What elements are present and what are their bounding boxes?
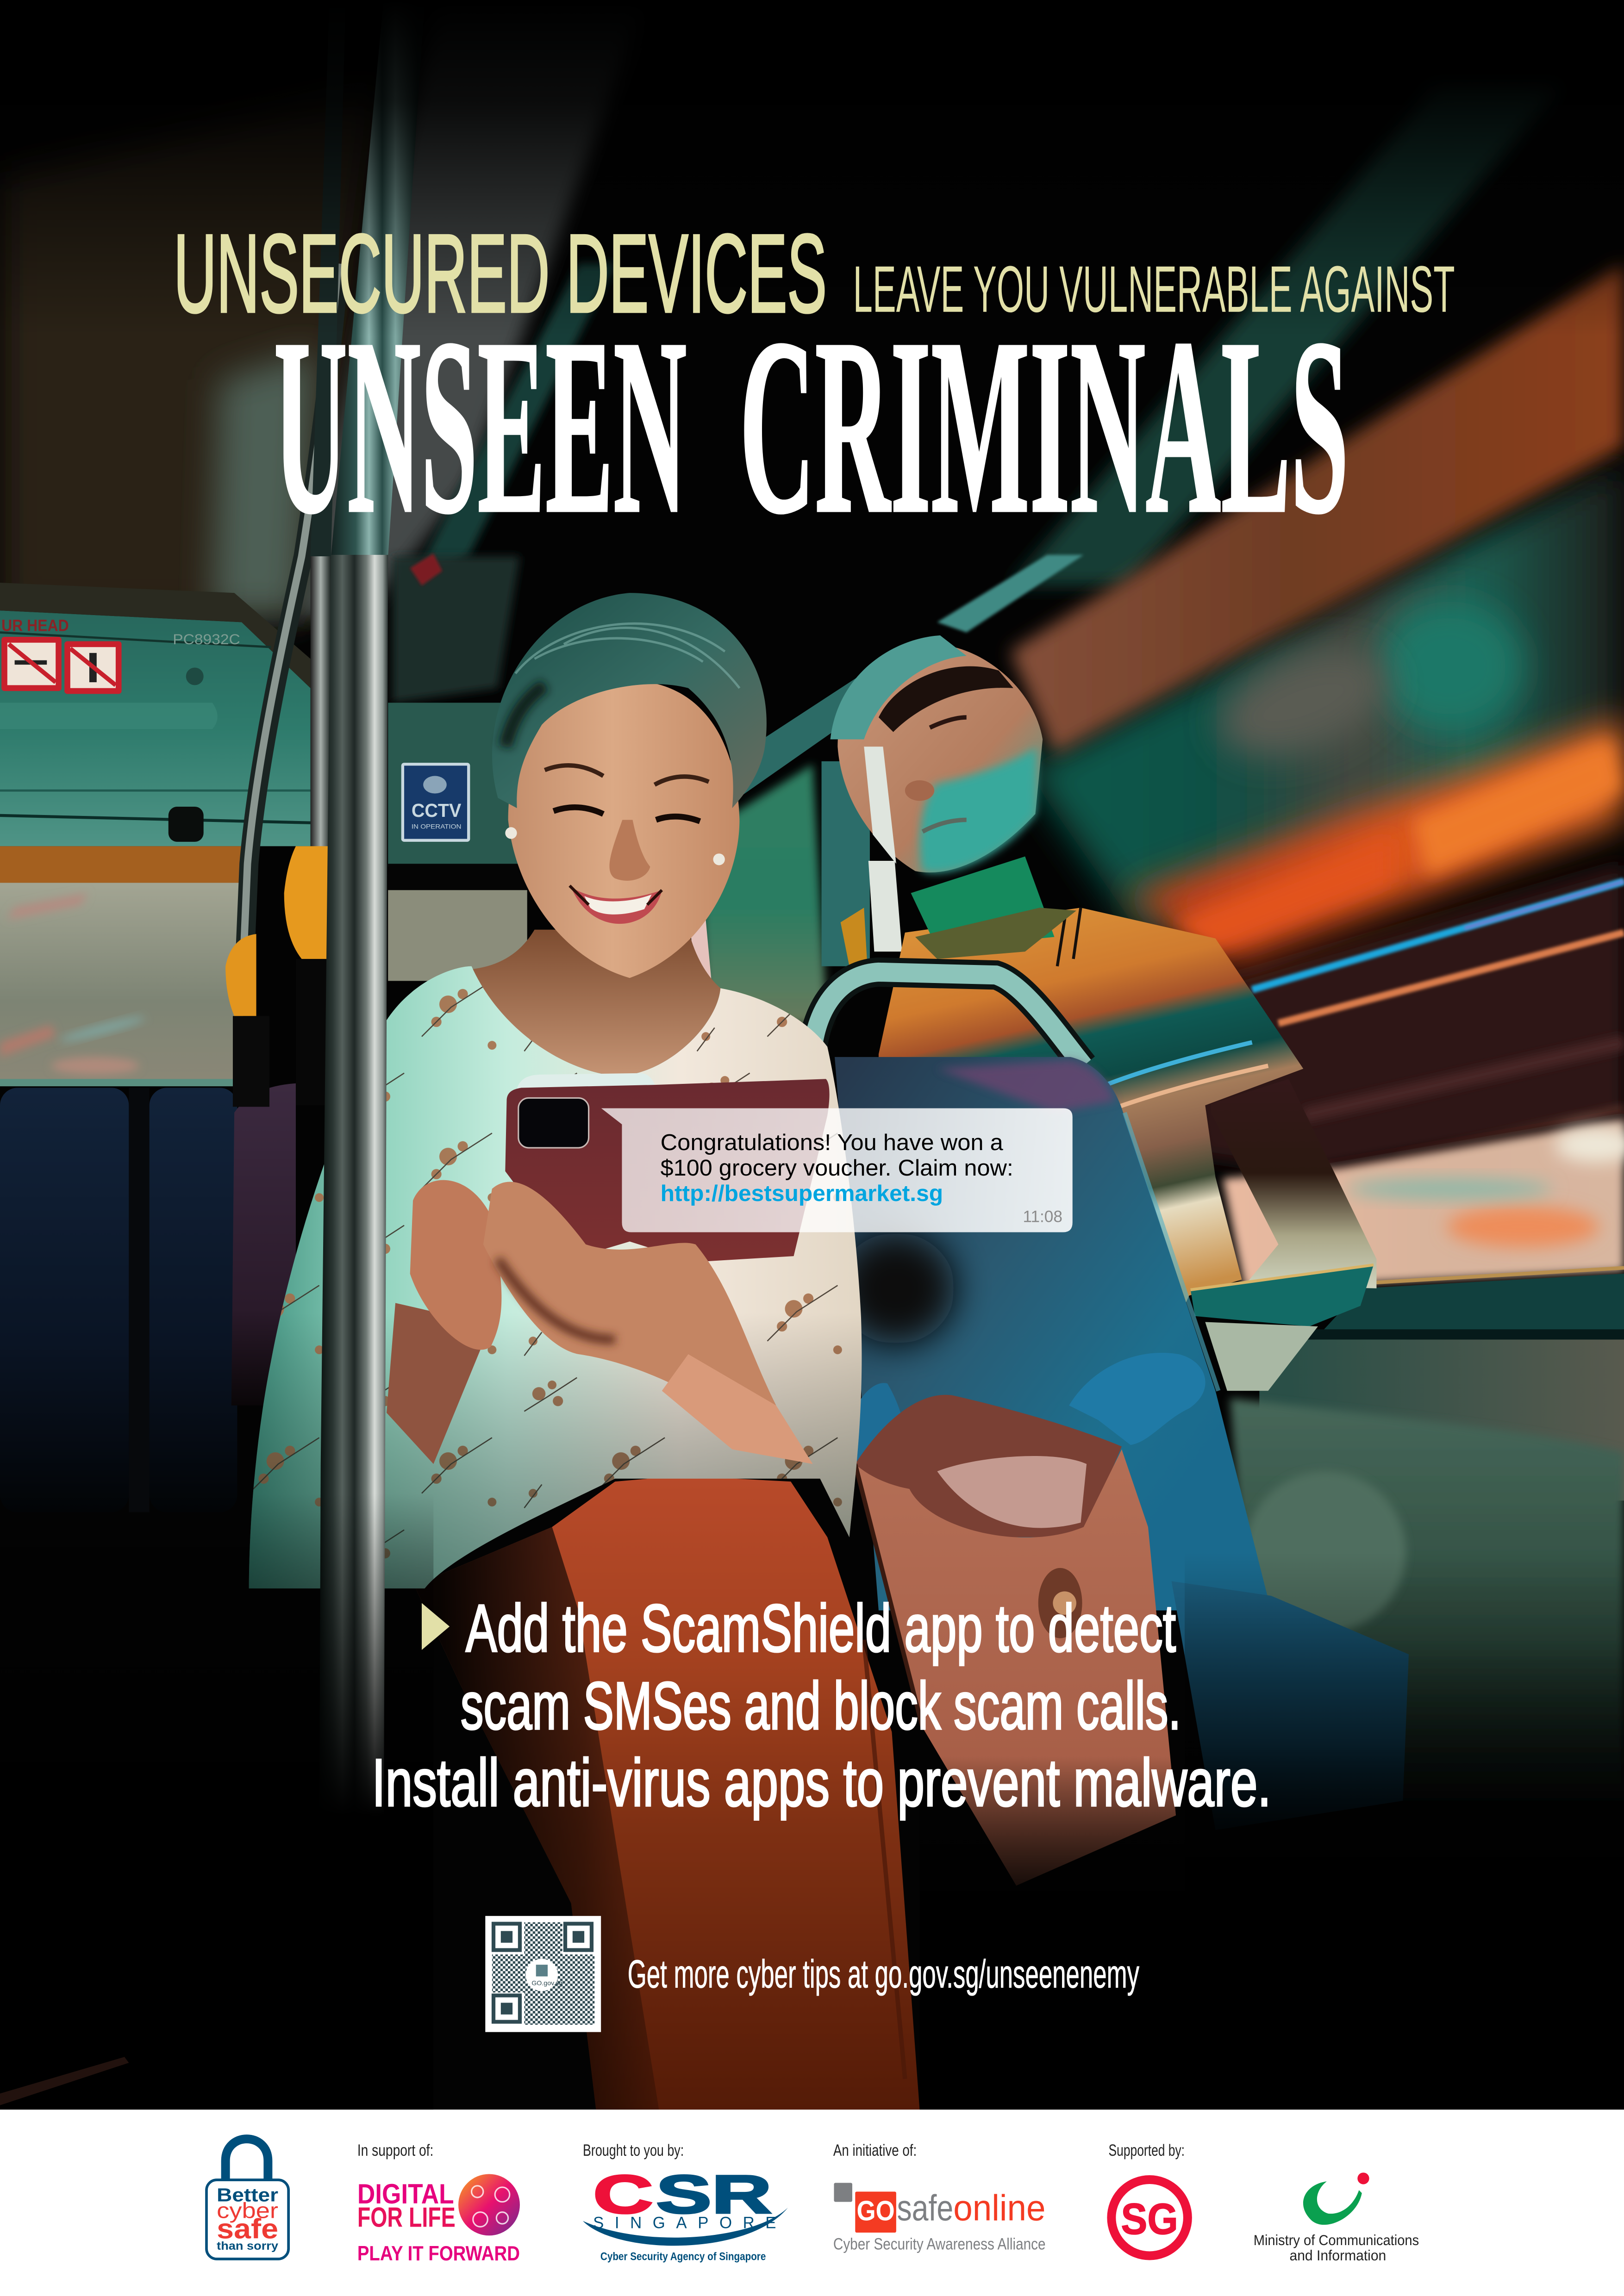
- logo: CSA Singapore: SINGAPORE: [593, 2215, 776, 2232]
- bus seat back with handle: [813, 972, 1409, 1830]
- logo: go safe online: safe: [897, 2187, 953, 2228]
- logo: CSA Singapore: Cyber Security Agency of Singapore: [600, 2251, 766, 2263]
- call to action text: Install anti-virus apps to prevent malware.: [372, 1745, 1271, 1820]
- logo: go safe online: GO: [856, 2195, 895, 2226]
- SMS message bubble: [601, 1108, 1073, 1232]
- logo: CSA Singapore: SR: [656, 2164, 772, 2225]
- headline: unseen criminals: UNSEEN: [274, 286, 687, 566]
- CCTV sign: IN OPERATION: [412, 823, 461, 830]
- logo: CSA Singapore: Brought to you by:: [583, 2142, 684, 2159]
- logo: better cyber safe than sorry: cyber: [217, 2198, 278, 2223]
- handbag being opened: [855, 1395, 1176, 1885]
- SMS message bubble: $100 grocery voucher. Claim now:: [661, 1156, 1013, 1181]
- logo: digital for life: DIGITAL: [357, 2178, 454, 2209]
- ghost: man seated behind the seat: [822, 635, 1303, 1464]
- logo: better cyber safe than sorry: than sorry: [217, 2240, 278, 2252]
- photo: left bus wall with teal panels: [0, 583, 311, 883]
- logo: go safe online: online: [953, 2187, 1046, 2228]
- photo: window panel behind the woman: [388, 703, 827, 1025]
- logo: go safe online: [833, 2142, 1046, 2253]
- logo: better cyber safe than sorry: safe: [217, 2214, 278, 2245]
- call to action text: scam SMSes and block scam calls.: [461, 1668, 1181, 1743]
- logo: SG: [1109, 2142, 1187, 2256]
- logo: go safe online: An initiative of:: [833, 2142, 917, 2159]
- faint light streak at bottom left: [0, 2057, 129, 2105]
- ghost: man's arm and sleeve: [1191, 1079, 1376, 1391]
- logo: better cyber safe than sorry: [206, 2139, 288, 2259]
- logo: better cyber safe than sorry: Better: [217, 2184, 278, 2205]
- warning signs on the wall: PC8932C: [173, 631, 240, 647]
- woman: neck: [472, 930, 720, 1076]
- woman: floral blouse: [249, 966, 864, 1596]
- logo: go safe online: Cyber Security Awareness Alliance: [833, 2235, 1046, 2253]
- empty bus seats on the left: [0, 1083, 296, 1512]
- warning signs on the wall: [1, 617, 240, 694]
- QR code: [485, 1916, 601, 2032]
- woman: bare forearm: [387, 1303, 491, 1464]
- call to action arrow: [422, 1603, 450, 1650]
- woman: orange trousers: [414, 1476, 919, 2109]
- SMS message bubble: Congratulations! You have won a: [661, 1130, 1004, 1155]
- woman: head with face and hair: [492, 593, 767, 978]
- handrail poles with yellow grips: [225, 0, 425, 1845]
- logo: CSA Singapore: [583, 2142, 788, 2263]
- ghost: man's lap and legs: [1230, 1398, 1624, 1801]
- headline: unsecured devices: UNSECURED DEVICES: [174, 211, 827, 336]
- woman: hands holding phone: [410, 1180, 813, 1464]
- CCTV sign: CCTV: [412, 800, 462, 821]
- CCTV sign: [401, 763, 470, 842]
- warning signs on the wall: UR HEAD: [1, 617, 69, 635]
- QR code: GO.gov.sg: [531, 1979, 562, 1987]
- cyber tips link: Get more cyber tips at go.gov.sg/unseenenemy: [628, 1952, 1139, 1996]
- SMS message bubble: http://bestsupermarket.sg: [661, 1181, 943, 1206]
- logo: digital for life: In support of:: [357, 2142, 433, 2159]
- left window with blurred light: [0, 883, 243, 1086]
- call to action text: [372, 1590, 1271, 1820]
- SMS message bubble: 11:08: [1023, 1208, 1062, 1226]
- logo: ministry of communications and information: and Information: [1290, 2247, 1386, 2264]
- logo: SG: SG: [1121, 2195, 1178, 2244]
- footer panel: [0, 2109, 1624, 2296]
- logo: digital for life: PLAY IT FORWARD: [357, 2242, 520, 2265]
- call to action text: Add the ScamShield app to detect: [466, 1590, 1176, 1666]
- logo: digital for life: FOR LIFE: [357, 2202, 456, 2233]
- smartphone in wine flip case: [505, 1073, 830, 1262]
- photo: bus interior ceiling: [0, 0, 1560, 813]
- logo: ministry of communications and information: Ministry of Communications: [1254, 2232, 1419, 2248]
- logo: digital for life: [357, 2142, 520, 2265]
- logo: SG: Supported by:: [1109, 2142, 1185, 2159]
- photo: motion-blurred city streaks through the right window: [1011, 263, 1624, 1500]
- logo: CSA Singapore: C: [593, 2164, 653, 2225]
- logo: ministry of communications and information: [1254, 2172, 1419, 2264]
- ghost: man's blue gloved hands: [846, 1353, 1206, 1481]
